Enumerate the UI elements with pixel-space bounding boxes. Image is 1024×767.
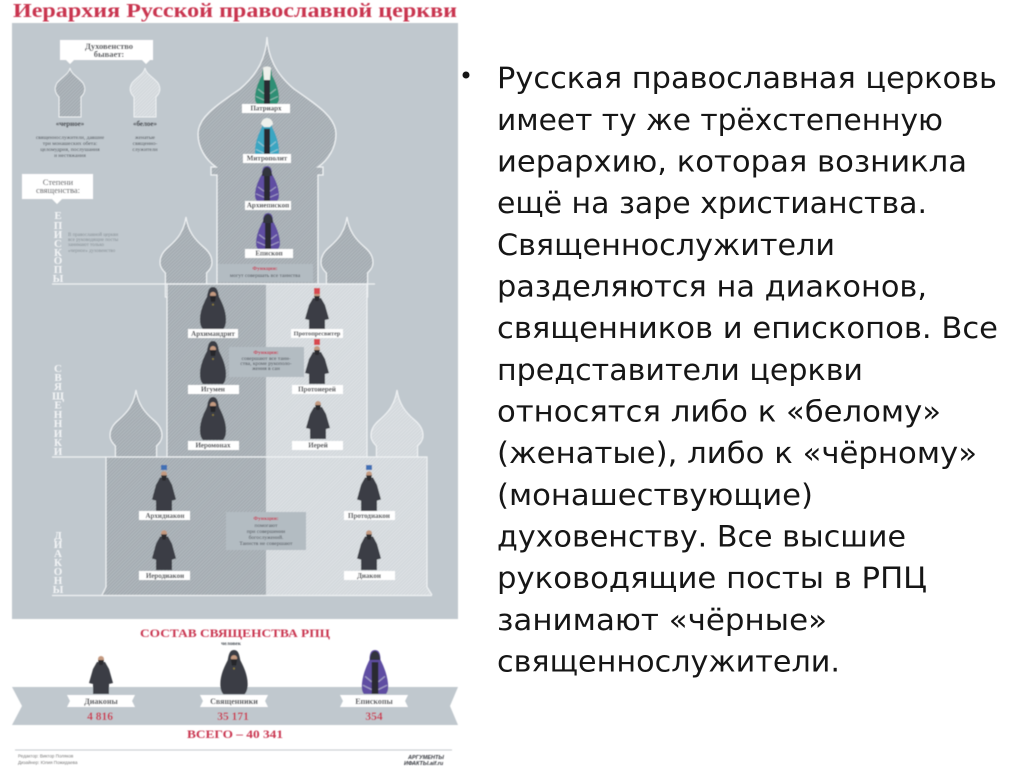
text block: description: (женатые), либо к «чёрному» xyxy=(497,436,977,470)
function box: priests: жения в сан xyxy=(251,366,280,372)
function box: deacons xyxy=(226,512,306,550)
figure: protopresbyter: Протопресвитер xyxy=(294,330,341,338)
vertical label: bishops: С xyxy=(54,238,62,250)
main dome tower xyxy=(198,37,336,284)
lower right side dome xyxy=(371,390,423,470)
figure: bishop: Епископ xyxy=(255,250,283,258)
figure: archimandrite: Архимандрит xyxy=(191,330,235,338)
figure: archpriest: Протоиерей xyxy=(298,386,336,394)
text: black clergy: «черное» xyxy=(56,120,85,128)
function box: priests: совершают все таин- xyxy=(242,356,291,362)
figure: metropolitan: Митрополит xyxy=(247,154,288,162)
text: white clergy: священно- xyxy=(133,141,157,147)
upper left side dome xyxy=(160,217,212,297)
figure: bishops count xyxy=(340,650,408,723)
vertical label: bishops: И xyxy=(54,229,63,241)
text: black clergy xyxy=(36,120,105,159)
function box: bishops xyxy=(218,264,313,282)
function box: bishops: могут совершать все таинства xyxy=(230,273,301,279)
text block: description: священников и епископов. Все xyxy=(497,311,998,345)
title: Иерархия Русской православной церкви xyxy=(13,1,457,22)
upper right side dome xyxy=(321,217,373,297)
vertical label: priests: И xyxy=(54,446,63,458)
figure: priests count: Священники xyxy=(210,697,258,706)
credits xyxy=(15,750,452,765)
vertical label: priests: К xyxy=(54,437,62,449)
note about bishops: «черное» духовенство xyxy=(68,249,116,254)
vertical label: deacons: А xyxy=(54,548,62,560)
text block: description: разделяются на диаконов, xyxy=(497,270,927,304)
bullet xyxy=(462,72,470,78)
vertical label: deacons: Д xyxy=(54,530,62,542)
figure: priest: Иерей xyxy=(308,442,328,450)
vertical label: priests: Н xyxy=(54,418,63,430)
text: black clergy: целомудрия, послушания xyxy=(40,147,100,153)
note about bishops: все руководящие посты xyxy=(68,238,119,243)
vertical label: priests: Е xyxy=(54,400,62,412)
logo: ИФАКТЫ.aif.ru xyxy=(404,761,444,767)
vertical label: bishops: П xyxy=(54,264,63,276)
figure: deacon xyxy=(344,530,395,580)
vertical label: bishops xyxy=(53,210,64,285)
figure: bishop xyxy=(245,213,293,258)
function box: priests xyxy=(229,347,304,377)
figure: priests count xyxy=(200,650,268,723)
note about bishops xyxy=(68,233,119,254)
text: black clergy: три монашеских обета: xyxy=(43,140,98,147)
credits: Дизайнер: Юлия Пожидаева xyxy=(18,759,78,765)
text block: description: (монашествующие) xyxy=(497,478,813,512)
figure: archdeacon xyxy=(139,465,190,520)
vertical label: bishops: Е xyxy=(54,210,62,222)
text block: description: относятся либо к «белому» xyxy=(497,394,941,428)
figure: metropolitan xyxy=(243,118,291,163)
vertical label: priests: И xyxy=(54,428,63,440)
vertical label: priests xyxy=(52,363,64,458)
logo: АРГУМЕНТЫ xyxy=(407,755,444,761)
vertical label: deacons: И xyxy=(54,539,63,551)
figure: patriarch: Патриарх xyxy=(250,104,282,112)
function box: priests: ства, кроме рукополо- xyxy=(240,361,292,367)
text block: description: руководящие посты в РПЦ xyxy=(497,561,927,595)
figure: priest xyxy=(292,401,343,450)
lower left side dome xyxy=(110,390,162,470)
vertical label: deacons: Н xyxy=(54,575,63,587)
text: white clergy xyxy=(132,120,158,153)
text block: description: иерархию, которая возникла xyxy=(497,144,967,178)
icon: white clergy dome xyxy=(130,68,160,117)
figure: archbishop: Архиепископ xyxy=(247,202,289,210)
figure: protodeacon: Протодиакон xyxy=(348,512,390,520)
note about bishops: В православной церкви xyxy=(68,233,119,238)
vertical label: deacons: Ы xyxy=(53,584,64,596)
callout: clergy types: бывает: xyxy=(94,49,124,59)
figure: protopresbyter xyxy=(291,288,343,338)
text block: description: ещё на заре христианства. xyxy=(497,186,927,220)
note about bishops: занимают только xyxy=(68,243,105,248)
function box: deacons: богослужений. xyxy=(249,534,284,541)
function box: deacons: помогают xyxy=(255,523,278,529)
figure: hegumen xyxy=(188,341,239,394)
figure: hieromonk xyxy=(188,397,239,450)
vertical label: priests: Я xyxy=(54,381,62,393)
text block: description xyxy=(497,61,998,678)
text: white clergy: женатые xyxy=(134,135,156,141)
figure: deacons count: Диаконы xyxy=(84,697,118,706)
callout: degrees of priesthood: священства: xyxy=(36,185,80,195)
credits: Редактор: Виктор Поляков xyxy=(18,754,74,758)
figure: hierodeacon xyxy=(139,530,190,580)
caption: people: человек xyxy=(221,641,242,647)
callout: degrees of priesthood xyxy=(22,174,93,204)
icon: black clergy dome xyxy=(55,68,85,117)
figure: bishops count: 354 xyxy=(365,711,383,723)
total: ВСЕГО – 40 341 xyxy=(187,727,283,741)
figure: bishops count: Епископы xyxy=(355,697,393,706)
vertical label: bishops: К xyxy=(54,247,62,259)
figure: hieromonk: Иеромонах xyxy=(195,442,231,450)
function box: deacons: при совершении xyxy=(247,529,285,535)
text block: description: духовенству. Все высшие xyxy=(497,520,906,554)
text block: description: священнослужители. xyxy=(497,644,840,678)
tier divider lines xyxy=(52,284,432,596)
figure: archimandrite xyxy=(188,287,238,338)
vertical label: priests: Н xyxy=(54,409,63,421)
callout: clergy types xyxy=(60,40,153,64)
text block: description: Русская православная церковь xyxy=(497,61,997,95)
logo xyxy=(404,755,444,767)
panel: hierarchy background xyxy=(12,23,458,619)
figure: archpriest xyxy=(292,339,343,394)
text: black clergy: и нестяжания xyxy=(54,153,86,159)
figure: deacons count: 4 816 xyxy=(87,711,113,723)
vertical label: priests: В xyxy=(54,372,62,384)
text: white clergy: «белое» xyxy=(133,120,158,128)
function box: priests: Функции: xyxy=(253,350,279,356)
vertical label: deacons xyxy=(53,530,64,596)
callout: clergy types: Духовенство xyxy=(85,41,133,51)
vertical label: bishops: Ы xyxy=(53,273,64,285)
ribbon xyxy=(12,687,458,725)
figure: deacon: Диакон xyxy=(357,572,381,580)
text block: description: Священнослужители xyxy=(497,228,835,262)
figure: hegumen: Игумен xyxy=(201,386,225,394)
figure: priests count: 35 171 xyxy=(217,711,249,723)
text: black clergy: священнослужители, давшие xyxy=(36,135,105,141)
figure: archbishop xyxy=(245,166,291,210)
vertical label: priests: Щ xyxy=(52,390,64,402)
text: white clergy: служители xyxy=(132,147,158,153)
vertical label: deacons: К xyxy=(54,557,62,569)
vertical label: bishops: О xyxy=(54,255,63,267)
figure: hierodeacon: Иеродиакон xyxy=(146,572,184,580)
vertical label: priests: С xyxy=(54,363,62,375)
deacons tier xyxy=(102,457,432,595)
vertical label: deacons: О xyxy=(54,566,63,578)
function box: deacons: Таинств не совершают xyxy=(239,541,293,547)
priests tier xyxy=(167,284,367,457)
callout: degrees of priesthood: Степени xyxy=(43,177,74,187)
vertical label: bishops: П xyxy=(54,220,63,232)
figure: archdeacon: Архидиакон xyxy=(145,512,185,520)
text block: description: имеет ту же трёхстепенную xyxy=(497,103,943,137)
heading: clergy composition: СОСТАВ СВЯЩЕНСТВА РПЦ xyxy=(140,626,331,640)
figure: deacons count xyxy=(67,656,135,723)
text block: description: занимают «чёрные» xyxy=(497,603,827,637)
function box: deacons: Функции: xyxy=(253,516,279,522)
figure: patriarch xyxy=(242,66,290,113)
text block: description: представители церкви xyxy=(497,353,863,387)
figure: protodeacon xyxy=(344,465,395,520)
infographic xyxy=(12,1,458,767)
function box: bishops: Функции: xyxy=(252,266,278,272)
